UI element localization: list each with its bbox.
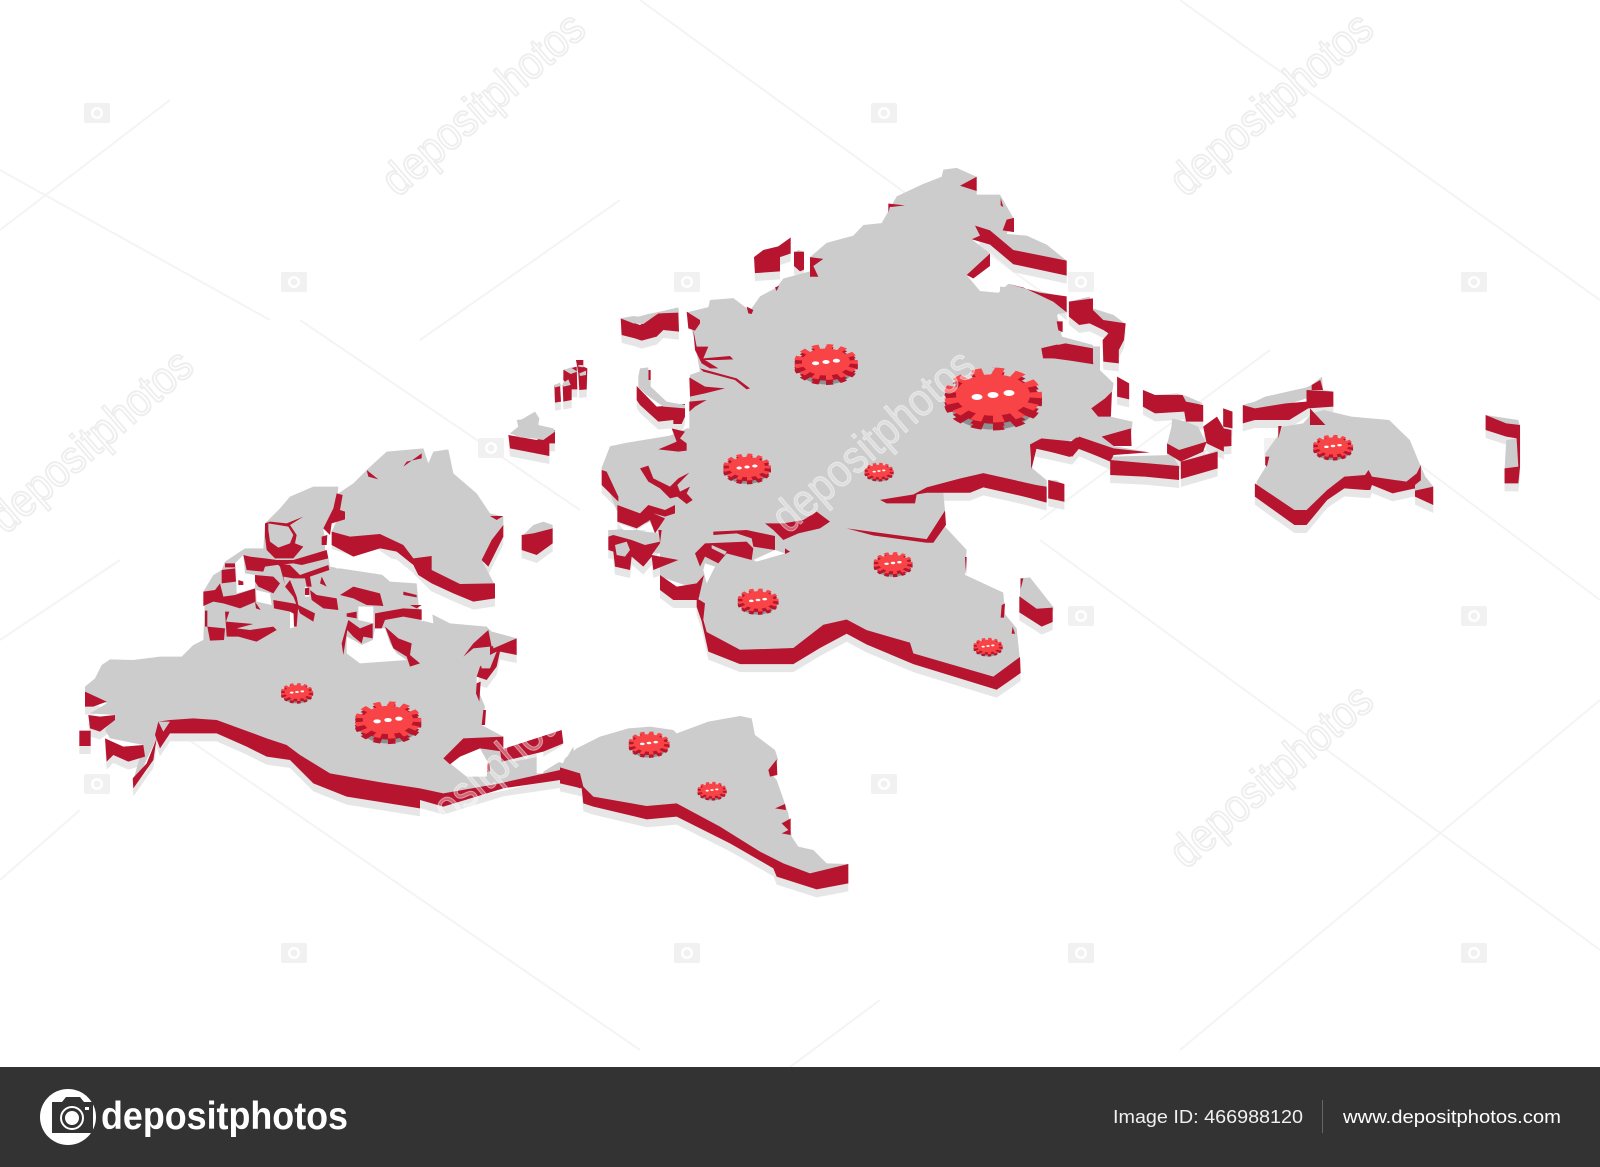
Greenland [332, 448, 503, 587]
watermark over map: depositphotos [370, 673, 595, 878]
Australia and New Guinea [1243, 377, 1520, 512]
Iceland [522, 522, 553, 538]
virus marker: South America south [699, 783, 725, 800]
Islands near Australia [1069, 297, 1232, 467]
Baffin island top [268, 523, 293, 548]
virus marker: North America large [359, 704, 417, 743]
virus marker: Central Asia large [950, 371, 1036, 430]
footer logo wordmark: depositphotos [101, 1095, 348, 1138]
Greenland and east Canada channels [367, 453, 503, 725]
virus marker: West Africa [740, 590, 776, 614]
Brazil coast nicks [487, 759, 791, 835]
Arctic ocean and Indian ocean islands [754, 237, 1064, 611]
virus marker: North America small [283, 684, 311, 703]
details near Australia and Southeast Asia [1091, 380, 1325, 467]
map drop shadow [79, 234, 1520, 897]
North America and Arctic islands [85, 487, 575, 797]
virus marker: South America north [631, 733, 667, 757]
background watermark pattern: depositphotos [1158, 673, 1383, 878]
map extrusions: red sides [79, 177, 1520, 889]
watermark over map: depositphotos [760, 338, 985, 543]
virus marker: Australia [1316, 436, 1350, 460]
footer divider [1322, 1100, 1323, 1133]
footer logo icon: camera [40, 1089, 96, 1145]
channels in Scandinavia, the Baltic and the Mediterranean [640, 307, 830, 567]
footer website: www.depositphotos.com [1342, 1106, 1561, 1127]
Arctic island tops in Scandinavia and Europe group [608, 307, 727, 557]
South America [560, 716, 848, 877]
channels in East Asia and Africa [775, 177, 1100, 634]
map landmasses: grey top surfaces [85, 168, 1520, 877]
East and Southeast Asia [1000, 287, 1150, 493]
virus marker: Northern Eurasia [798, 347, 854, 384]
inland seas and white gaps [235, 377, 785, 777]
North Atlantic island tops [510, 365, 586, 440]
watermark over map [370, 338, 985, 878]
small grey island tops over red sides [158, 307, 1433, 732]
virus marker: Middle East [866, 464, 892, 481]
virus marker: East Africa [876, 553, 910, 577]
footer image id: Image ID: 466988120 [1113, 1106, 1303, 1127]
Eurasia and Africa [602, 168, 1100, 686]
footer bar [0, 1067, 1600, 1167]
outer coastline sides [79, 226, 1520, 889]
Canadian Arctic archipelago channels [203, 493, 422, 667]
virus marker: Southern Africa [975, 639, 1001, 656]
virus marker: Europe [726, 455, 768, 484]
